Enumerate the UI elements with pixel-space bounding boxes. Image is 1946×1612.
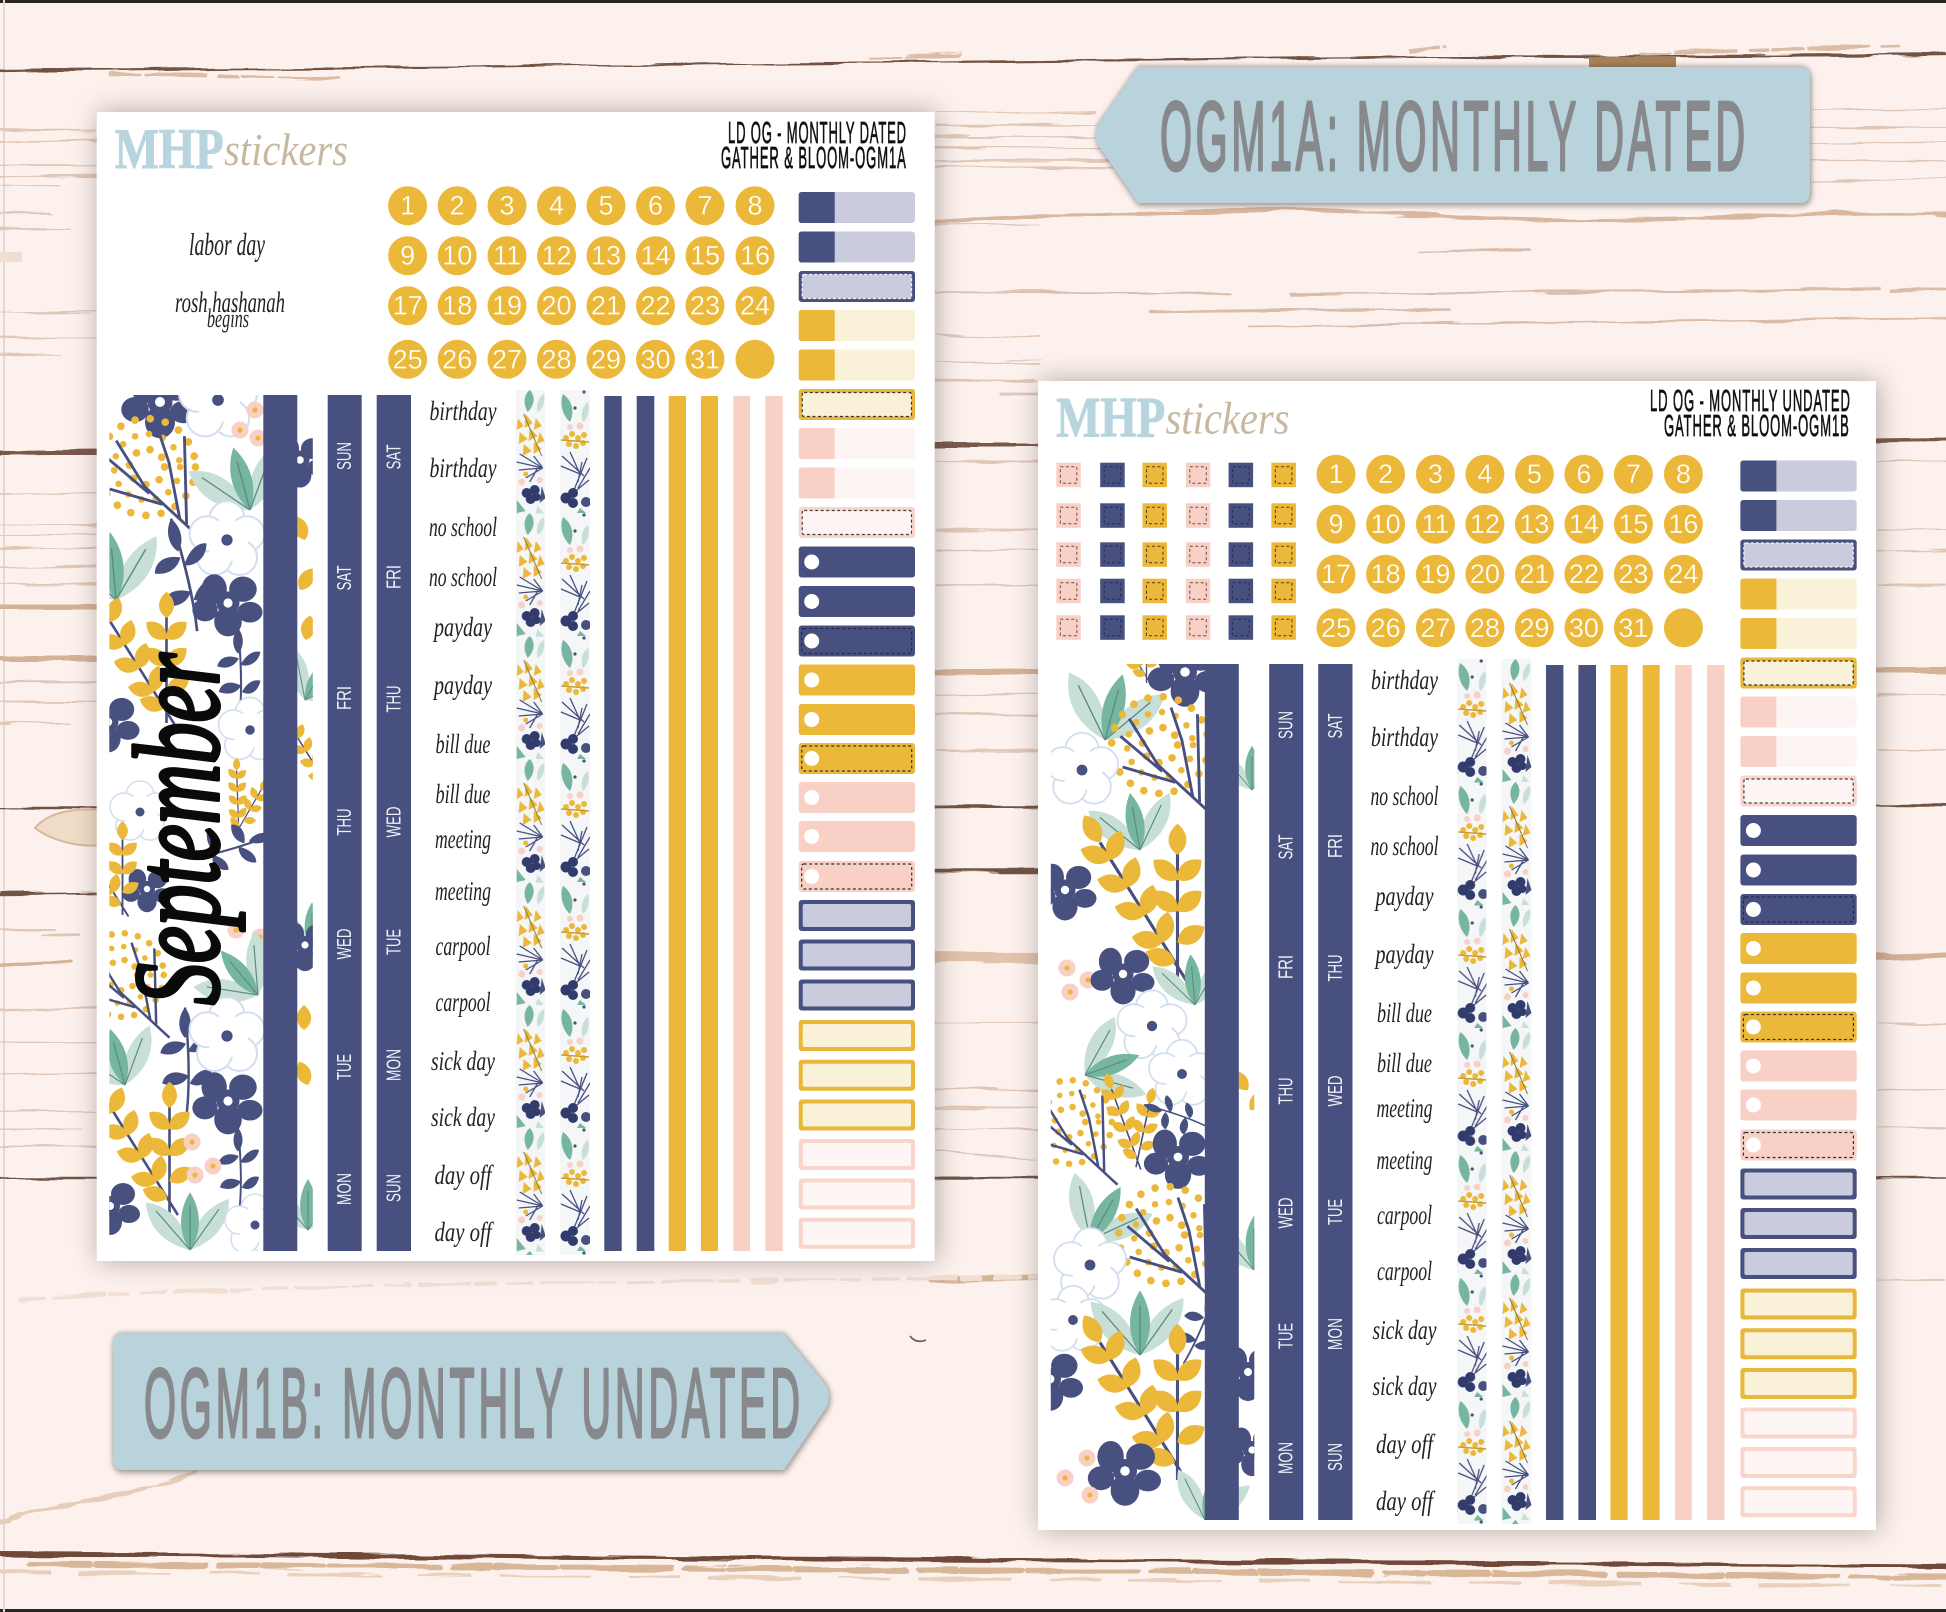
floral washi strips	[1457, 659, 1532, 1524]
logo: MHP stickers	[1056, 386, 1290, 450]
script event labels: bill due	[436, 729, 491, 759]
date number circles 1-31: 28	[541, 344, 572, 374]
weekday strips: SUN	[1325, 1443, 1347, 1471]
holiday script labels	[175, 226, 285, 333]
date number circles 1-31: 6	[648, 191, 663, 221]
date number circles 1-31: 20	[1470, 559, 1500, 589]
navy strip over floral	[263, 395, 297, 1251]
date number circles 1-31: 2	[450, 191, 465, 221]
small dashed squares grid	[1056, 463, 1296, 640]
date number circles 1-31: 16	[1668, 509, 1698, 539]
script event labels: meeting	[435, 876, 491, 906]
script event labels: day off	[434, 1217, 494, 1247]
date number circles 1-31: 21	[591, 291, 621, 321]
date number circles 1-31: 5	[1527, 459, 1542, 489]
script event labels: carpool	[436, 987, 490, 1017]
weekday strips: MON	[1325, 1318, 1347, 1350]
weekday strips: SUN	[1276, 711, 1298, 739]
date number circles 1-31: 31	[690, 344, 720, 374]
script event labels: bill due	[436, 779, 491, 809]
label sticker column	[799, 192, 915, 1249]
date number circles 1-31: 2	[1378, 459, 1393, 489]
sheet header text	[721, 116, 906, 176]
weekday strips	[1269, 664, 1352, 1520]
date number circles 1-31: 5	[598, 191, 614, 221]
script event labels	[1370, 665, 1438, 1516]
date number circles 1-31: 3	[499, 191, 515, 221]
weekday strips: THU	[334, 808, 356, 836]
script event labels: carpool	[1377, 1256, 1432, 1286]
tag: OGM1B monthly undated	[113, 1334, 829, 1470]
sticker sheet: OGM1B undated	[1016, 381, 1876, 1530]
date number circles 1-31: 26	[1371, 613, 1401, 643]
date number circles 1-31: 22	[1569, 559, 1599, 589]
holiday script labels: rosh hashanah	[175, 286, 285, 319]
script event labels: day off	[434, 1160, 494, 1190]
floral September strip	[109, 395, 313, 1251]
date number circles 1-31: 12	[541, 241, 572, 271]
date number circles 1-31: 16	[740, 241, 770, 271]
weekday strips: FRI	[334, 686, 356, 710]
floral strip	[1050, 664, 1254, 1520]
weekday strips: FRI	[384, 565, 406, 589]
weekday strips: FRI	[1276, 955, 1298, 979]
date number circles 1-31: 19	[492, 291, 522, 321]
date number circles 1-31: 30	[1569, 613, 1599, 643]
script event labels: meeting	[1376, 1145, 1432, 1175]
sheet header text	[1650, 384, 1850, 444]
script event labels: no school	[429, 562, 497, 592]
weekday strips: TUE	[1325, 1199, 1347, 1225]
date number circles 1-31: 15	[1618, 509, 1648, 539]
date number circles 1-31: 4	[549, 191, 564, 221]
date number circles 1-31: 17	[393, 291, 423, 321]
date number circles 1-31: 9	[400, 241, 415, 271]
script event labels: no school	[429, 512, 497, 542]
weekday strips: SAT	[334, 566, 356, 590]
script event labels: meeting	[1376, 1093, 1432, 1123]
script event labels: meeting	[435, 824, 491, 854]
date number circles 1-31: 11	[1421, 509, 1449, 539]
script event labels: birthday	[430, 453, 497, 483]
date number circles 1-31: 25	[393, 344, 423, 374]
date number circles 1-31: 3	[1428, 459, 1443, 489]
date number circles 1-31: 11	[493, 241, 521, 271]
logo: MHP stickers: stickers	[1166, 392, 1290, 444]
date number circles 1-31: 30	[640, 344, 671, 374]
script event labels: birthday	[1371, 722, 1438, 752]
holiday script labels: labor day	[189, 226, 265, 262]
logo: MHP stickers	[115, 118, 348, 181]
sheet header text: LD OG - MONTHLY UNDATED	[1650, 384, 1850, 419]
date number circles 1-31: 20	[541, 291, 572, 321]
weekday strips: TUE	[334, 1054, 356, 1080]
date number circles 1-31: 27	[1420, 613, 1450, 643]
date number circles 1-31: 4	[1477, 459, 1492, 489]
date number circles 1-31: 14	[640, 241, 671, 271]
date number circles 1-31: 31	[1618, 613, 1648, 643]
script event labels: sick day	[431, 1046, 495, 1076]
date number circles 1-31: 9	[1328, 509, 1344, 539]
logo: MHP stickers: MHP	[1056, 386, 1165, 450]
script event labels: bill due	[1377, 998, 1432, 1028]
date number circles 1-31: 8	[1676, 459, 1691, 489]
script event labels: sick day	[1372, 1371, 1437, 1401]
script event labels: carpool	[1377, 1200, 1432, 1230]
date number circles 1-31: 10	[442, 241, 472, 271]
date number circles 1-31: 19	[1420, 559, 1450, 589]
date number circles 1-31: 7	[1626, 459, 1641, 489]
tag title: OGM1A: OGM1A: MONTHLY DATED	[1160, 81, 1745, 191]
weekday strips: TUE	[1276, 1323, 1298, 1349]
script event labels: birthday	[1371, 665, 1438, 695]
sticker sheet: OGM1A dated	[58, 112, 935, 1261]
weekday strips: TUE	[384, 929, 406, 955]
weekday strips: MON	[384, 1049, 406, 1081]
weekday strips: WED	[1276, 1198, 1298, 1228]
date number circles 1-31: 24	[1668, 559, 1698, 589]
date number circles 1-31: 10	[1371, 509, 1401, 539]
script event labels: day off	[1376, 1486, 1436, 1516]
weekday strips: MON	[334, 1173, 356, 1205]
date number circles 1-31: 23	[690, 291, 720, 321]
weekday strips: SUN	[334, 442, 356, 470]
navy strip over floral	[1205, 664, 1239, 1520]
date number circles 1-31: 8	[747, 191, 763, 221]
date number circles 1-31: 7	[697, 191, 713, 221]
weekday strips: THU	[1276, 1078, 1298, 1104]
floral washi strips	[516, 390, 590, 1255]
weekday strips: SAT	[384, 444, 406, 470]
script event labels: sick day	[1372, 1315, 1437, 1345]
date number circles 1-31: 21	[1519, 559, 1549, 589]
solid colour stripes	[1546, 665, 1724, 1520]
logo: MHP stickers: MHP	[115, 118, 224, 181]
sheet header text: GATHER & BLOOM-OGM1A	[721, 141, 906, 176]
sheet header text: GATHER & BLOOM-OGM1B	[1664, 409, 1849, 444]
date number circles 1-31: 22	[640, 291, 671, 321]
date number circles 1-31: 28	[1470, 613, 1500, 643]
weekday strips: MON	[1276, 1442, 1298, 1474]
date number circles 1-31: 18	[1371, 559, 1401, 589]
script event labels: payday	[433, 670, 492, 700]
script event labels: bill due	[1377, 1048, 1432, 1078]
date number circles 1-31: 26	[442, 344, 472, 374]
date number circles 1-31	[388, 186, 774, 379]
script event labels: birthday	[430, 396, 497, 426]
date number circles 1-31: 27	[492, 344, 522, 374]
date number circles 1-31: 15	[690, 241, 720, 271]
date number circles 1-31: 13	[1519, 509, 1549, 539]
weekday strips: WED	[334, 928, 356, 960]
date number circles 1-31: 12	[1470, 509, 1500, 539]
weekday strips: WED	[384, 806, 406, 838]
date number circles 1-31: 18	[442, 291, 472, 321]
date number circles 1-31: 29	[1519, 613, 1549, 643]
weekday strips: THU	[1325, 954, 1347, 982]
solid colour stripes	[604, 396, 783, 1251]
script event labels: payday	[1374, 881, 1434, 911]
date number circles 1-31: 13	[591, 241, 621, 271]
weekday strips: WED	[1325, 1076, 1347, 1106]
script event labels: payday	[1374, 939, 1434, 969]
date number circles 1-31: 17	[1321, 559, 1351, 589]
script event labels: payday	[433, 612, 492, 642]
tag title: OGM1B: OGM1B: MONTHLY UNDATED	[144, 1348, 800, 1458]
date number circles 1-31: 24	[740, 291, 770, 321]
logo: MHP stickers: stickers	[224, 124, 348, 175]
date number circles 1-31: 6	[1576, 459, 1591, 489]
weekday strips	[328, 395, 411, 1251]
sheet header text: LD OG - MONTHLY DATED	[728, 116, 906, 151]
weekday strips: SUN	[384, 1174, 406, 1202]
month title: September: September	[110, 653, 245, 1005]
script event labels: no school	[1370, 831, 1438, 861]
date number circles 1-31: 25	[1321, 613, 1351, 643]
date number circles 1-31: 23	[1618, 559, 1648, 589]
script event labels: sick day	[431, 1102, 495, 1132]
date number circles 1-31: 1	[400, 191, 415, 221]
script event labels: carpool	[436, 931, 490, 961]
date number circles 1-31: 29	[591, 344, 621, 374]
date number circles 1-31: 1	[1328, 459, 1344, 489]
label sticker column	[1740, 460, 1857, 1517]
date number circles 1-31	[1316, 455, 1703, 647]
script event labels: day off	[1376, 1429, 1436, 1459]
weekday strips: THU	[384, 686, 406, 712]
tag: OGM1A monthly dated	[1096, 67, 1810, 203]
script event labels: no school	[1370, 781, 1438, 811]
weekday strips: SAT	[1325, 714, 1347, 738]
date number circles 1-31: 14	[1569, 509, 1599, 539]
holiday script labels: begins	[207, 304, 249, 333]
weekday strips: SAT	[1276, 834, 1298, 860]
script event labels	[429, 396, 497, 1247]
weekday strips: FRI	[1325, 834, 1347, 858]
